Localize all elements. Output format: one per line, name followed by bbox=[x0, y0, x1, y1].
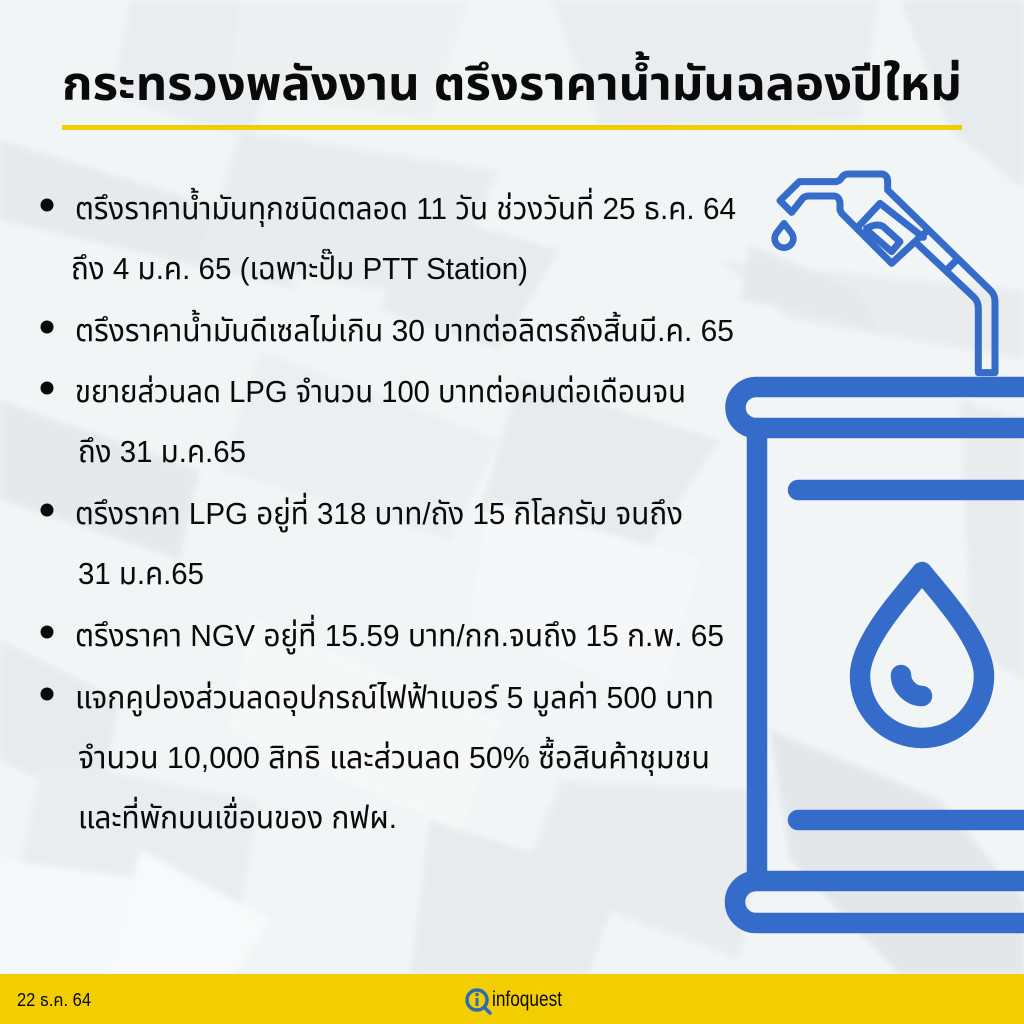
bullet item 1: ตรึงราคาน้ำมันทุกชนิดตลอด 11 วัน ช่วงวันที่ 25 ธ.ค. 64 bbox=[75, 187, 736, 227]
title: กระทรวงพลังงาน ตรึงราคาน้ำมันฉลองปีใหม่ bbox=[62, 51, 962, 110]
bullet item 6: จำนวน 10,000 สิทธิ และส่วนลด 50% ซื้อสินค้าชุมชน bbox=[78, 736, 710, 776]
bullet item 6: และที่พักบนเขื่อนของ กฟผ. bbox=[78, 796, 397, 835]
icon: small oil drop bbox=[775, 223, 793, 248]
footer logo bbox=[467, 988, 562, 1013]
footer date: 22 ธ.ค. 64 bbox=[17, 990, 91, 1010]
bullet item 6: แจกคูปองส่วนลดอุปกรณ์ไฟฟ้าเบอร์ 5 มูลค่า 500 บาท bbox=[75, 680, 714, 716]
icon: oil barrel bbox=[735, 387, 1024, 923]
barrel side wall bbox=[747, 428, 767, 881]
bullet item 1: ถึง 4 ม.ค. 65 (เฉพาะปั๊ม PTT Station) bbox=[71, 248, 528, 286]
bullet item 3: ถึง 31 ม.ค.65 bbox=[78, 434, 246, 469]
footer bar bbox=[0, 974, 1024, 1024]
bullet item 4 bbox=[40, 492, 683, 591]
bullet item 5: ตรึงราคา NGV อยู่ที่ 15.59 บาท/กก.จนถึง 15 ก.พ. 65 bbox=[75, 614, 724, 654]
bullet item 4: 31 ม.ค.65 bbox=[78, 556, 204, 591]
barrel top rim bbox=[736, 387, 1024, 428]
barrel upper band bbox=[798, 480, 1024, 500]
bullet item 3: ขยายส่วนลด LPG จำนวน 100 บาทต่อคนต่อเดือนจน bbox=[75, 374, 686, 409]
bullet item 1 bbox=[40, 187, 736, 286]
title underline bbox=[62, 125, 962, 130]
bullet item 2: ตรึงราคาน้ำมันดีเซลไม่เกิน 30 บาทต่อลิตรถึงสิ้นมี.ค. 65 bbox=[75, 309, 734, 348]
bullet list bbox=[40, 187, 736, 835]
barrel lower band bbox=[798, 810, 1024, 830]
large oil drop bbox=[860, 572, 984, 738]
bullet item 4: ตรึงราคา LPG อยู่ที่ 318 บาท/ถัง 15 กิโลกรัม จนถึง bbox=[75, 492, 683, 532]
logo wordmark: infoquest bbox=[492, 988, 562, 1011]
bullet item 6 bbox=[40, 680, 714, 835]
icon: fuel nozzle bbox=[780, 174, 995, 373]
barrel bottom rim bbox=[735, 881, 1024, 923]
bullet item 3 bbox=[40, 374, 686, 469]
logo magnifier icon bbox=[467, 990, 490, 1013]
drop highlight bbox=[901, 675, 922, 696]
